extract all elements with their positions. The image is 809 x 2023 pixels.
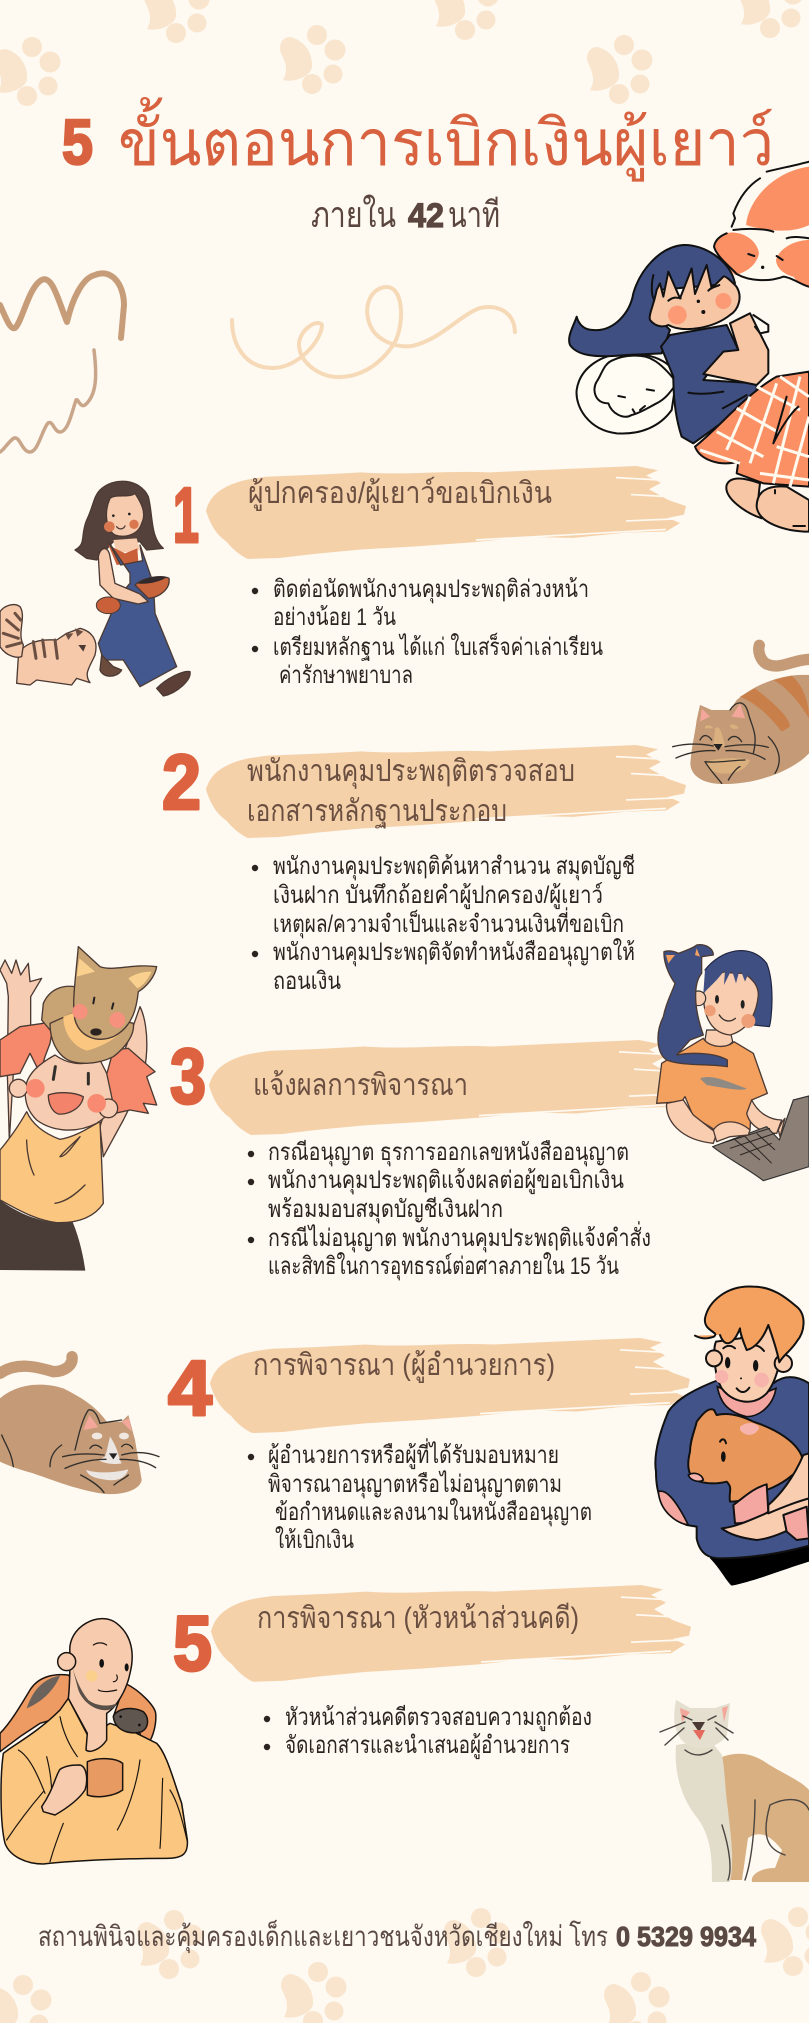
step 3 number: 3: [170, 1032, 206, 1120]
step 3 bullets: [248, 1139, 651, 1281]
step 5 bullets: หัวหน้าส่วนคดีตรวจสอบความถูกต้อง: [285, 1704, 592, 1732]
illustration detail: feet: [726, 479, 762, 518]
step 2 brush heading: พนักงานคุมประพฤติตรวจสอบ: [247, 755, 575, 790]
step 3 bullets: กรณีไม่อนุญาต พนักงานคุมประพฤติแจ้งคำสั่ง: [268, 1221, 651, 1253]
step 1 number: 1: [173, 471, 199, 559]
title: ขั้นตอนการเบิกเงินผู้เยาว์: [118, 97, 774, 182]
step 2 bullets: เงินฝาก บันทึกถ้อยคำผู้ปกครอง/ผู้เยาว์: [273, 881, 603, 910]
step 3 brush heading: [209, 1040, 689, 1135]
title: 5: [62, 106, 93, 178]
step 1 bullets: [252, 576, 603, 689]
illustration detail: hair: [695, 1287, 804, 1362]
step 2 brush heading: [206, 745, 686, 838]
illustration detail: coffee cup: [87, 1759, 123, 1797]
step 3 bullets: และสิทธิในการอุทธรณ์ต่อศาลภายใน 15 วัน: [268, 1252, 619, 1281]
illustration detail: striped cat: [0, 605, 96, 685]
illustration detail: shirt: [1, 1698, 187, 1864]
illustration: smiling sitting cat: [660, 1700, 809, 1882]
illustration: resting tabby cat: [673, 645, 809, 784]
illustration detail: arms: [733, 1484, 768, 1523]
scribble: brown loops: [0, 273, 124, 338]
illustration detail: pajama pants: [695, 372, 809, 487]
subtitle: 42: [408, 197, 444, 235]
scribble: thin zigzag: [0, 350, 96, 452]
step 1 bullets: ค่ารักษาพยาบาล: [279, 662, 413, 689]
step 4 brush heading: [210, 1338, 690, 1433]
step 2 bullets: ถอนเงิน: [273, 968, 341, 995]
illustration detail: dog on head: [42, 947, 157, 1063]
illustration: girl with bowl and striped cat: [0, 481, 190, 696]
subtitle: ภายใน: [311, 194, 396, 235]
step 3 bullets: พนักงานคุมประพฤติแจ้งผลต่อผู้ขอเบิกเงิน: [268, 1167, 624, 1195]
paw pattern bottom: [0, 1907, 809, 2023]
footer: 0 5329 9934: [616, 1921, 756, 1952]
step 3 bullets: กรณีอนุญาต ธุรการออกเลขหนังสืออนุญาต: [268, 1139, 629, 1167]
step 1 brush heading: ผู้ปกครอง/ผู้เยาว์ขอเบิกเงิน: [248, 476, 552, 511]
step 2 bullets: พนักงานคุมประพฤติจัดทำหนังสืออนุญาตให้: [273, 938, 635, 967]
step 4 bullets: พิจารณาอนุญาตหรือไม่อนุญาตตาม: [268, 1470, 562, 1499]
step 4 brush heading: การพิจารณา (ผู้อำนวยการ): [253, 1349, 555, 1383]
illustration detail: shirt and arm: [661, 325, 757, 443]
step 3 bullets: พร้อมมอบสมุดบัญชีเงินฝาก: [268, 1196, 503, 1224]
illustration detail: cat on shoulders: [0, 1675, 156, 1752]
illustration detail: cat face: [113, 1709, 148, 1733]
illustration detail: face: [714, 1325, 783, 1402]
step 2 bullets: เหตุผล/ความจำเป็นและจำนวนเงินที่ขอเบิก: [273, 907, 624, 939]
step 1 bullets: อย่างน้อย 1 วัน: [273, 604, 396, 631]
step 4 number: 4: [168, 1344, 212, 1432]
step 2 brush heading: เอกสารหลักฐานประกอบ: [247, 795, 507, 829]
paw pattern top: [0, 0, 804, 106]
step 4 bullets: ผู้อำนวยการหรือผู้ที่ได้รับมอบหมาย: [268, 1438, 559, 1470]
illustration detail: pillow: [577, 354, 677, 434]
illustration detail: face: [25, 1055, 112, 1130]
illustration detail: hand: [42, 1765, 87, 1815]
step 5 brush heading: การพิจารณา (หัวหน้าส่วนคดี): [257, 1602, 579, 1635]
illustration: girl at laptop with cat: [657, 945, 809, 1181]
step 2 bullets: [252, 853, 635, 995]
illustration: child with dog on head: [0, 947, 157, 1271]
step 4 bullets: ข้อกำหนดและลงนามในหนังสืออนุญาต: [275, 1498, 592, 1527]
illustration detail: head: [68, 1619, 132, 1751]
step 1 bullets: ติดต่อนัดพนักงานคุมประพฤติล่วงหน้า: [273, 576, 589, 604]
step 2 number: 2: [162, 738, 201, 826]
step 5 number: 5: [173, 1599, 212, 1687]
illustration detail: hair and face: [705, 951, 772, 1027]
illustration: boy hugging pet: [655, 1287, 809, 1586]
step 5 bullets: จัดเอกสารและนำเสนอผู้อำนวยการ: [285, 1732, 570, 1760]
illustration detail: navy cat: [658, 945, 727, 1067]
step 1 brush heading: [206, 466, 686, 559]
step 4 bullets: ให้เบิกเงิน: [275, 1526, 354, 1554]
illustration detail: hair back: [103, 1048, 157, 1113]
illustration detail: shirt: [0, 1112, 103, 1223]
subtitle: [311, 194, 500, 235]
step 5 bullets: [264, 1704, 592, 1760]
illustration detail: laptop: [713, 1096, 809, 1181]
subtitle: นาที: [448, 194, 500, 235]
illustration: sleeping girl with dog: [569, 162, 809, 532]
illustration: resting cat with white blaze: [0, 1357, 159, 1494]
step 1 bullets: เตรียมหลักฐาน ได้แก่ ใบเสร็จค่าเล่าเรียน: [273, 632, 603, 661]
step 5 brush heading: [211, 1585, 691, 1682]
illustration detail: hair: [569, 245, 735, 356]
illustration: man with coffee and cat: [0, 1619, 187, 1864]
step 2 bullets: พนักงานคุมประพฤติค้นหาสำนวน สมุดบัญชี: [273, 853, 635, 881]
step 3 brush heading: แจ้งผลการพิจารณา: [253, 1069, 468, 1102]
illustration detail: pet: [688, 1409, 803, 1502]
step 4 bullets: [248, 1438, 592, 1554]
scribble: cream swirl: [232, 287, 515, 377]
footer: สถานพินิจและคุ้มครองเด็กและเยาวชนจังหวัดเชียงใหม่ โทร: [38, 1919, 608, 1954]
